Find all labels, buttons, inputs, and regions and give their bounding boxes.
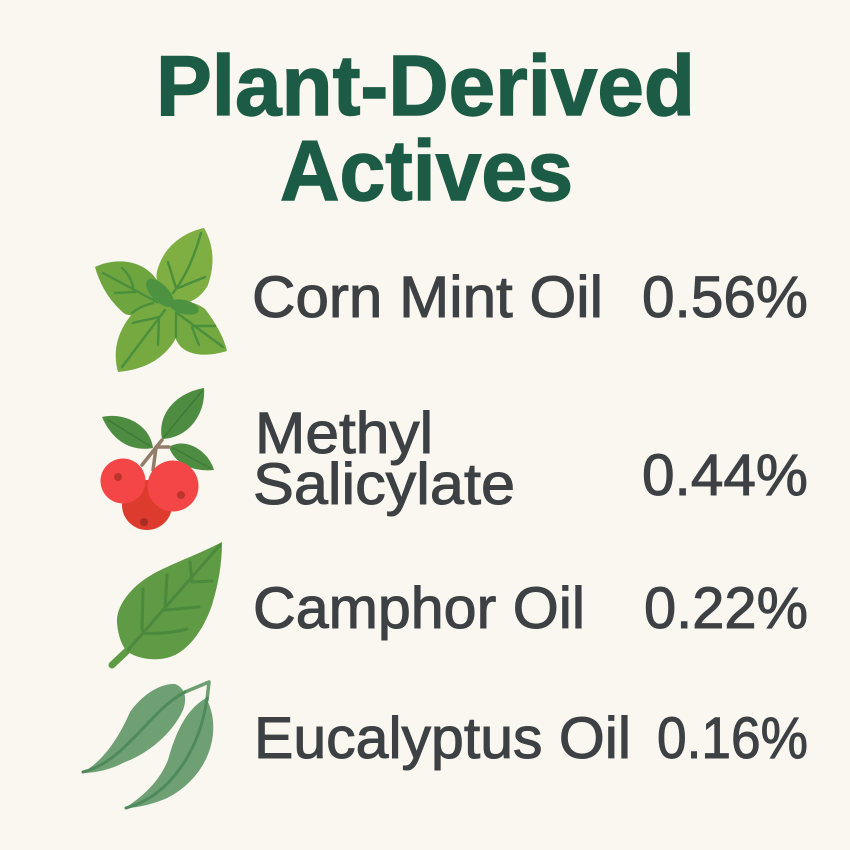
label: methyl salicylate	[253, 401, 515, 517]
icon: mint leaves	[95, 228, 227, 372]
title: Plant-Derived	[156, 39, 695, 134]
label: eucalyptus oil: Eucalyptus Oil	[254, 706, 631, 771]
row: eucalyptus oil	[82, 682, 808, 808]
icon: wintergreen berries	[100, 388, 214, 530]
icon: camphor leaf	[112, 542, 222, 665]
row: methyl salicylate	[100, 388, 808, 530]
label: camphor oil: Camphor Oil	[253, 576, 585, 641]
icon: eucalyptus leaves	[82, 682, 213, 808]
label: methyl salicylate: Methyl	[255, 401, 433, 466]
label: methyl salicylate: Salicylate	[253, 452, 515, 517]
row: corn mint oil	[95, 228, 808, 372]
value: 0.44%: 0.44%	[642, 443, 808, 508]
title: Actives	[280, 124, 573, 219]
title	[156, 39, 695, 219]
label: corn mint oil: Corn Mint Oil	[252, 265, 603, 330]
value: 0.22%: 0.22%	[644, 576, 808, 641]
row: camphor oil	[112, 542, 808, 665]
value: 0.16%: 0.16%	[657, 706, 808, 771]
value: 0.56%: 0.56%	[642, 265, 808, 330]
